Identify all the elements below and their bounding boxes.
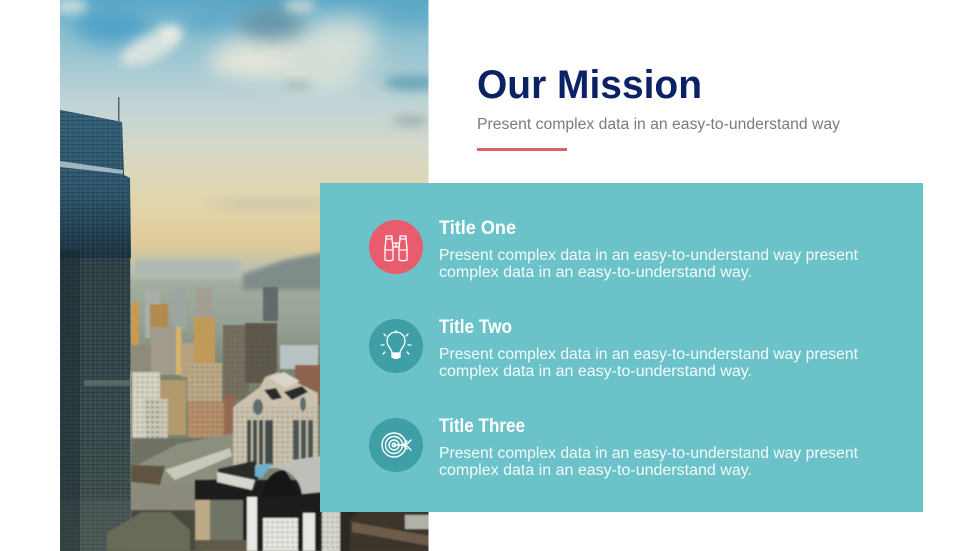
description three: complex data in an easy-to-understand way. xyxy=(439,462,752,479)
description three: Present complex data in an easy-to-understand way present xyxy=(439,445,859,462)
title three: Title Three xyxy=(439,416,525,437)
dark building with dome xyxy=(195,456,330,551)
heading: Our Mission xyxy=(477,63,702,107)
icon: binoculars xyxy=(369,220,423,274)
panel: teal content xyxy=(320,183,923,512)
item two: light bulb xyxy=(369,317,859,380)
bottom-left low building xyxy=(107,512,190,551)
icon: target with arrow xyxy=(369,418,423,472)
right-hand rooftops below panel xyxy=(320,510,430,551)
item one: binoculars xyxy=(369,218,859,281)
icon: light bulb xyxy=(369,319,423,373)
photo: city skyline xyxy=(52,0,440,551)
skyline haze xyxy=(125,252,325,370)
cream landmark building xyxy=(233,372,318,467)
item three: target xyxy=(369,416,859,479)
description two: Present complex data in an easy-to-understand way present xyxy=(439,346,859,363)
description two: complex data in an easy-to-understand way. xyxy=(439,363,752,380)
foreground tower xyxy=(60,97,131,551)
description one: complex data in an easy-to-understand way. xyxy=(439,264,752,281)
subtitle: Present complex data in an easy-to-understand way xyxy=(477,116,840,133)
accent line xyxy=(477,148,567,151)
title two: Title Two xyxy=(439,317,512,338)
title one: Title One xyxy=(439,218,516,239)
mid-distance buildings xyxy=(130,286,320,439)
foreground low-rise blocks xyxy=(131,433,236,551)
description one: Present complex data in an easy-to-understand way present xyxy=(439,247,859,264)
